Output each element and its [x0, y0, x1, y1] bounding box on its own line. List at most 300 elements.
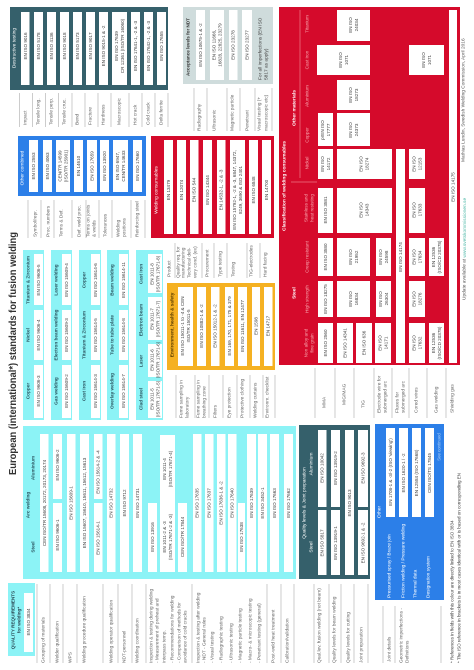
- row labels: arc welding: Welding coordination: [134, 618, 140, 663]
- column headings: [110, 264, 114, 409]
- standards boxes: arc welding: EN ISO 15609-1: [68, 486, 74, 520]
- column headings: arc welding: Steel: [30, 541, 36, 553]
- standards boxes: destructive testing: EN ISO 17641-1, -2 & -3: [133, 21, 138, 71]
- column headings: [138, 264, 144, 410]
- standards boxes: destructive testing: EN ISO 17642-1, -2 & -3: [146, 21, 151, 71]
- standards boxes: EN ISO 9606-5: [36, 264, 41, 296]
- row labels: destructive testing: Delta ferrite: [158, 100, 164, 125]
- row labels: arc welding: avoidance of cold cracks: [182, 610, 188, 663]
- row labels: arc welding: WPS: [68, 652, 74, 663]
- column headings: arc welding: Aluminium: [30, 456, 36, 480]
- column headings: Cast iron: [138, 264, 144, 284]
- heading: other: Other: [376, 506, 382, 518]
- standards boxes: classification grid: EN ISO: [348, 291, 353, 307]
- standards boxes: classification grid: EN ISO 14341: [342, 328, 348, 358]
- standards boxes: classification grid: 1071: [344, 54, 349, 65]
- row labels: NDT methods: macroscopic etc): [264, 94, 270, 131]
- standards boxes: acceptance levels: EN ISO 23277: [244, 30, 250, 60]
- standards boxes: [91, 254, 100, 418]
- standards boxes: classification grid: EN ISO: [378, 335, 382, 351]
- row labels: consumables: Hard facing: [262, 252, 268, 277]
- standards boxes: classification grid: 1071: [427, 54, 432, 65]
- standards boxes: destructive testing: EN ISO 9015-1 & -2: [101, 25, 106, 66]
- standards boxes: classification grid: EN ISO: [378, 249, 383, 265]
- column headers: classification: Copper: [304, 127, 310, 143]
- panel: acceptance levels for NDT: [183, 7, 273, 84]
- row labels: classification: [315, 368, 456, 418]
- heading: quality requirements: QUALITY REQUIREMENTS: [10, 591, 16, 649]
- standards boxes: arc welding: EN ISO 15614-2 & -4: [96, 450, 100, 494]
- standards boxes: quality levels: [318, 430, 368, 575]
- standards boxes: classification grid: EN ISO: [412, 202, 416, 218]
- row labels: arc welding: [37, 584, 294, 663]
- row labels: other combined: [28, 200, 145, 238]
- column headers: classification: heat resisting: [310, 194, 314, 222]
- row labels: arc welding: - Visual testing: [210, 631, 216, 663]
- panel: welding procedure specification processes: [51, 250, 72, 420]
- row labels: other combined: Terms on joints: [86, 204, 92, 237]
- standards boxes: EN ISO 15609-4: [64, 263, 69, 297]
- standards boxes: EHS: ISO/TR 15011-5: [186, 309, 191, 343]
- row labels: EHS: Protective clothing: [240, 378, 246, 418]
- column headings: Clad steel: [138, 388, 144, 410]
- standards boxes: classification grid: (ISO/CD 20378): [437, 240, 442, 273]
- note: all imperfections: For all imperfections (EN ISO: [258, 17, 264, 80]
- standards boxes: arc welding: EN ISO 13916: [150, 522, 155, 552]
- row labels: destructive testing: [20, 93, 168, 127]
- row labels: EHS: laboratory: [184, 396, 190, 418]
- standards boxes: other: [386, 428, 434, 517]
- row labels: arc welding: - Radiographic testing: [218, 616, 224, 663]
- row labels: NDT methods: Ultrasonic: [212, 109, 218, 131]
- row labels: EHS: Fume sampling in: [178, 380, 184, 418]
- standards boxes: other: EN ISO 1620-1 / -2: [401, 453, 406, 493]
- standards boxes: acceptance levels: [196, 10, 252, 80]
- row labels: destructive testing: Hot crack: [132, 104, 138, 125]
- standards boxes: arc welding: EN ISO 9712: [122, 489, 127, 517]
- standards boxes: other combined: EN ISO 13920: [102, 151, 107, 181]
- standards boxes: other combined: EN ISO 4063: [45, 152, 50, 180]
- panel: welding consumables: [151, 136, 274, 238]
- panel: procedure qualification materials: [79, 250, 101, 420]
- standards boxes: EN 1011-8: [150, 263, 154, 285]
- standards boxes: (ISO/TR 17671-6): [156, 341, 160, 378]
- row labels: EHS: Fume sampling in: [196, 380, 202, 418]
- row labels: arc welding: Inspection & testing after welding: [196, 592, 202, 663]
- standards boxes: arc welding: EN ISO 3452-1: [260, 487, 265, 519]
- heading: acceptance levels: Acceptance levels for NDT: [186, 18, 190, 76]
- row labels: NDT methods: Penetrant: [244, 110, 250, 131]
- row labels: arc welding: - Ultrasonic testing: [228, 623, 234, 663]
- panel: quality levels and joint preparation: [299, 425, 370, 579]
- standards boxes: EN ISO 15614-8: [121, 318, 126, 352]
- standards boxes: arc welding: (ISO/TR 17671-4): [168, 450, 173, 487]
- row labels: consumables: TIG-electrodes: [248, 245, 254, 277]
- standards boxes: classification grid: EN ISO 636: [362, 330, 366, 355]
- row labels: destructive testing: Cold crack: [146, 102, 152, 125]
- standards boxes: destructive testing: EN ISO 17655: [159, 31, 164, 61]
- row labels: classification: Cored wires: [414, 387, 420, 413]
- row labels: quality levels: Qual.lev. fusion welding (not beam): [316, 588, 322, 663]
- note: all imperfections: [258, 17, 270, 80]
- standards boxes: classification grid: 18276: [418, 292, 422, 305]
- column headings: Electron beam welding: [54, 309, 58, 361]
- heading: quality levels: Aluminium: [308, 453, 314, 475]
- standards boxes: destructive testing: EN ISO 17639: [114, 31, 119, 61]
- standards boxes: EN 1011-5: [150, 388, 154, 410]
- standards boxes: EN ISO 15614-3: [93, 374, 98, 408]
- standards boxes: EN ISO 15609-2: [64, 374, 69, 408]
- standards boxes: classification grid: 26304: [384, 292, 389, 305]
- standards boxes: acceptance levels: 16828, 22825, 23279: [218, 23, 222, 67]
- column headers: classification: Non alloy and: [304, 328, 308, 357]
- standards boxes: arc welding: EN ISO 15614-1: [96, 521, 100, 555]
- panel: filler qualification by material: [23, 250, 44, 420]
- standards boxes: classification grid: 24598: [384, 250, 389, 263]
- column headings: [26, 256, 30, 399]
- standards boxes: arc welding: [40, 434, 293, 572]
- standards boxes: acceptance levels: EN ISO 23278: [230, 30, 236, 60]
- heading: quality requirements: for welding*: [16, 607, 22, 633]
- row labels: consumables: Type testing: [218, 251, 224, 277]
- row labels: EHS: Environm. checklist: [264, 376, 270, 418]
- standards boxes: classification grid: EN ISO: [358, 202, 364, 218]
- panel: procedure qualification applications: [107, 250, 129, 420]
- column headers: classification: Aluminium: [304, 85, 310, 107]
- standards boxes: EN 1011-7: [150, 308, 154, 330]
- row labels: quality levels: Quality levels for cutting: [346, 612, 352, 663]
- standards boxes: arc welding: EN ISO 17662: [286, 488, 291, 518]
- row labels: EHS: [176, 375, 275, 418]
- row labels: quality levels: Quality levels for beam welding: [332, 596, 338, 663]
- column headings: Nickel: [26, 328, 30, 342]
- row labels: joint details: Joint details: [386, 636, 392, 662]
- standards boxes: EHS: EN 169, 170, 171, 175 & 379: [227, 296, 232, 356]
- standards boxes: arc welding: EN ISO 17639: [249, 488, 254, 518]
- row labels: consumables: Testing: [230, 261, 236, 277]
- standards boxes: classification grid: 14343: [364, 203, 370, 216]
- panel: quality requirements: [8, 583, 35, 656]
- standards boxes: other: CEN ISO/TS 17845: [427, 453, 432, 493]
- row labels: classification: Electrode wire for: [376, 375, 382, 413]
- standards boxes: quality levels: EN ISO 10042: [320, 453, 324, 483]
- standards boxes: classification grid: 17634: [418, 250, 422, 263]
- credit: author: Mathias Lundin, Swedish Welding Commission, April 2016: [460, 38, 466, 162]
- standards boxes: classification grid: 16834: [354, 292, 359, 305]
- standards boxes: acceptance levels: EN ISO 10675-1 & -2: [198, 23, 203, 67]
- standards boxes: EN 1011-6: [150, 349, 154, 371]
- panel: other combined (blue): [18, 136, 146, 196]
- row labels: consumables: Procurement: [204, 249, 210, 277]
- panel: classification of welding consumables: [279, 7, 460, 365]
- standards boxes: classification grid: EN ISO: [358, 156, 364, 172]
- row labels: classification: Gas welding: [434, 386, 440, 413]
- standards boxes: other combined: CEN/TR 14599: [58, 150, 62, 182]
- standards boxes: classification grid: EN ISO: [412, 156, 416, 172]
- row labels: NDT methods: Radiography: [196, 103, 202, 131]
- row labels: arc welding: Welding procedure qualification: [82, 596, 88, 663]
- standards boxes: EN ISO 9606-3: [36, 375, 41, 407]
- standards boxes: quality levels: EN ISO 9692-3: [360, 452, 366, 484]
- heading: destructive testing: Destructive testing: [12, 28, 18, 68]
- standards boxes: other combined: [29, 140, 142, 192]
- standards boxes: classification grid: 17777: [326, 123, 331, 136]
- standards boxes: (ISO/TR 17671-8): [156, 255, 160, 292]
- row labels: NDT methods: Visual testing (+: [256, 97, 262, 131]
- heading: other: See continued: [436, 433, 442, 461]
- column headers: classification: High strength: [304, 285, 310, 313]
- standards boxes: (ISO/TR 17671-5): [156, 380, 160, 417]
- standards boxes: EHS: EN 14717: [266, 315, 270, 336]
- standards boxes: EN ISO 15614-5: [93, 318, 98, 352]
- standards boxes: EHS: EN ISO 10882-1 & -2: [199, 304, 204, 348]
- row labels: consumables: Quality req. for: [176, 246, 182, 278]
- standards boxes: classification grid: [317, 10, 457, 363]
- row labels: arc welding: - Recommendations for welding: [170, 595, 176, 663]
- standards boxes: [148, 254, 162, 418]
- standards boxes: arc welding: EN ISO 17635: [194, 488, 200, 518]
- standards boxes: welding consumables: EN 13479: [166, 179, 171, 200]
- row labels: classification: Shielding gas: [450, 384, 456, 413]
- heading: classification: Other materials: [292, 90, 298, 126]
- standards boxes: destructive testing: EN ISO 4136: [49, 32, 54, 60]
- standards boxes: classification grid: EN ISO 2560: [323, 329, 328, 357]
- column headings: Tube to tube plate: [110, 315, 114, 355]
- footnotes: [450, 473, 462, 663]
- standards boxes: classification grid: EN ISO: [348, 249, 353, 265]
- column headings: arc welding: Arc welding: [26, 492, 30, 518]
- column headers: classification: [304, 15, 314, 357]
- heading: welding consumables: Welding consumables: [154, 166, 160, 214]
- standards boxes: other combined: EN ISO 17660: [135, 151, 140, 181]
- standards boxes: EHS: EN ISO 15011-1 to -4 & CEN: [180, 296, 185, 356]
- row labels: destructive testing: Tensile long.: [36, 98, 42, 125]
- standards boxes: classification grid: EN ISO: [412, 335, 416, 351]
- row labels: EHS: breathing zone: [202, 386, 208, 418]
- panel: destructive testing: [10, 7, 168, 90]
- row labels: destructive testing: Hardness: [100, 104, 106, 125]
- standards boxes: arc welding: EN ISO 15607, 15610, 15611, 15612, 15613: [82, 457, 87, 548]
- row labels: arc welding: Calibration/validation: [284, 618, 290, 663]
- heading: quality levels: [302, 453, 314, 553]
- column headings: Electron beam: [138, 304, 144, 336]
- column headers: classification: Titanium: [304, 15, 310, 33]
- standards boxes: classification grid: 14171: [384, 336, 388, 349]
- row labels: EHS: Welding curtains: [252, 382, 258, 418]
- standards boxes: destructive testing: CR 12361 (ISO/TR 16060): [120, 18, 125, 73]
- row labels: consumables: very cond. (ex): [192, 246, 198, 278]
- standards boxes: classification grid: EN ISO: [412, 249, 416, 265]
- standards boxes: classification grid: 17633: [418, 203, 422, 216]
- standards boxes: classification grid: EN ISO: [412, 291, 416, 307]
- standards boxes: other combined: EN ISO 6947,: [115, 152, 120, 180]
- row labels: EHS: Filters: [212, 404, 218, 418]
- standards boxes: EN ISO 15614-7: [121, 374, 126, 408]
- row labels: destructive testing: Bend: [74, 113, 80, 125]
- standards boxes: acceptance levels: EN ISO 11666,: [212, 30, 216, 60]
- row labels: other combined: Reinforcing steel: [134, 201, 140, 237]
- column headings: Cast iron: [82, 381, 86, 401]
- row labels: arc welding: - Macro- & microscopic testing: [248, 598, 254, 663]
- row labels: joint details: Definitions: [404, 640, 410, 663]
- standards boxes: welding consumables: [164, 140, 271, 234]
- standards boxes: arc welding: EN ISO 17640: [230, 488, 234, 518]
- panel: other (blue): [375, 424, 444, 600]
- heading: other combined: Other combined: [20, 150, 26, 185]
- standards boxes: welding consumables: EN ISO 15792-1, -2 & -3, 6847, 14372,: [232, 150, 237, 230]
- standards boxes: classification grid: prEN ISO: [320, 120, 325, 140]
- standards boxes: classification grid: 18274: [364, 157, 370, 170]
- row labels: arc welding: - NDT - General rules: [202, 617, 208, 663]
- row labels: arc welding: Welder qualification: [54, 621, 60, 663]
- row labels: joint details: [383, 606, 441, 663]
- row labels: arc welding: Grouping of materials: [40, 617, 46, 663]
- row labels: other combined: Welding: [116, 219, 122, 237]
- standards boxes: classification grid: 12153: [418, 157, 422, 170]
- title: European (international*) standards for fusion welding: [8, 232, 19, 475]
- column headers: classification: Cast iron: [304, 50, 310, 69]
- row labels: other combined: Symbol/repr.: [32, 210, 38, 237]
- row labels: EHS: Eye protection: [226, 387, 232, 418]
- standards boxes: [62, 254, 71, 418]
- standards boxes: EHS: EN ISO 15012-1 & -2: [212, 304, 218, 348]
- credit: update link: Update available at www.svetskommissionen.se: [462, 198, 468, 300]
- heading: other: [376, 433, 442, 518]
- standards box: EN ISO 3834: EN ISO 3834: [26, 608, 31, 636]
- column headings: Laser welding: [54, 264, 58, 296]
- row labels: arc welding: Inspection & testing during welding: [148, 589, 154, 663]
- column headings: Copper: [82, 272, 86, 288]
- row labels: arc welding: - Magnetic particle testing: [238, 608, 244, 663]
- standards boxes: destructive testing: EN ISO 9018: [62, 32, 67, 60]
- row labels: NDT methods: Magnetic particle: [230, 94, 236, 131]
- standards boxes: classification grid: EN ISO: [348, 87, 353, 103]
- standards boxes: classification grid: 24034: [354, 18, 359, 31]
- standards boxes: classification grid: EN ISO 3580: [323, 243, 328, 271]
- footnotes: * The ISO reference in brackets is in most cases identical with or is based on corresponding EN: [456, 473, 462, 663]
- row labels: quality levels: Joint preparation: [358, 627, 364, 663]
- row labels: destructive testing: Tensile perp.: [48, 98, 54, 125]
- row labels: destructive testing: Macroscopic: [116, 97, 122, 125]
- standards boxes: classification grid: 17632: [418, 336, 422, 349]
- column headings: Titanium & Zirconium: [82, 311, 86, 359]
- standards boxes: welding consumables: 8249, 3690 & ISO 2401: [238, 166, 243, 214]
- standards boxes: arc welding: EN ISO 17663: [272, 488, 277, 518]
- row labels: consumables: Product: [166, 260, 172, 277]
- standards boxes: classification grid: EN 12536: [431, 246, 436, 267]
- column headings: [82, 272, 86, 401]
- row labels: quality levels: [314, 584, 368, 663]
- row labels: arc welding: interpass temp.: [162, 630, 168, 663]
- row labels: NDT methods: [194, 88, 272, 131]
- row labels: classification: Fluxes for: [394, 392, 400, 413]
- column headers: classification: Creep resistant: [304, 240, 310, 273]
- standards boxes: (ISO/TR 17671-7): [156, 300, 160, 337]
- standards boxes: other: EN 12584 (ISO 17668): [414, 449, 419, 496]
- standards boxes: classification grid: EN ISO: [378, 291, 383, 307]
- standards boxes: other combined: CEN/TR 14633: [121, 150, 126, 182]
- standards boxes: quality levels: EN ISO 5817: [320, 529, 324, 557]
- row labels: destructive testing: Tensile cruc.: [62, 98, 68, 125]
- standards boxes: other: EN 1708-1 & -3/-2 (ISO 'viewing'): [388, 438, 393, 506]
- standards boxes: classification grid: 24373: [354, 123, 359, 136]
- standards boxes: arc welding: EN ISO 9606-2: [55, 449, 60, 481]
- standards boxes: quality levels: EN ISO 13919-2: [333, 451, 338, 485]
- standards boxes: arc welding: EN ISO 17638: [239, 522, 244, 552]
- standards boxes: other combined: EN 14610: [76, 155, 81, 176]
- standards boxes: other combined: EN ISO 17659: [90, 151, 94, 181]
- standards boxes: classification grid: EN ISO: [320, 156, 325, 172]
- column headings: [54, 264, 58, 405]
- standards boxes: classification grid: 21952: [354, 250, 359, 263]
- row titles: other: Friction welding / Pressure welding: [400, 524, 406, 598]
- column headings: Beam welding: [110, 264, 114, 296]
- footnotes: * References in fields with this colour are directly linked to EN ISO 3834: [450, 520, 454, 663]
- row labels: other combined: positions: [122, 217, 128, 237]
- standards boxes: [119, 254, 128, 418]
- standards boxes: arc welding: EN 1011-4: [162, 458, 167, 480]
- standards boxes: classification grid: EN ISO: [338, 52, 343, 68]
- standards boxes: arc welding: EN ISO 17636-1 & -2: [218, 481, 224, 525]
- standards boxes: arc welding: EN ISO 14732: [108, 488, 114, 518]
- column headings: Overlay welding: [110, 373, 114, 409]
- standards boxes: welding consumables: EN ISO 544: [192, 177, 196, 202]
- standards boxes: classification grid: EN ISO 14175: [450, 172, 456, 202]
- row labels: joint details: Geometric imperfections -: [398, 608, 404, 663]
- row labels: classification: MIG/MAG: [342, 383, 348, 405]
- row labels: other combined: Proc. numbers: [46, 205, 52, 237]
- row labels: arc welding: - Comparison of methods for: [176, 602, 182, 663]
- standards boxes: welding consumables: EN ISO 6848: [251, 176, 256, 204]
- row labels: destructive testing: Fracture: [88, 107, 94, 125]
- row labels: other combined: & welds: [92, 220, 98, 237]
- heading: classification: Classification of welding consumables: [282, 141, 288, 231]
- column headings: arc welding: [26, 456, 36, 553]
- heading: quality requirements: [10, 591, 22, 649]
- standards boxes: destructive testing: EN ISO 5178: [36, 32, 41, 60]
- standards boxes: other combined: EN ISO 2553: [31, 152, 36, 180]
- heading: classification: Steel: [292, 287, 298, 299]
- standards boxes: destructive testing: [21, 12, 166, 85]
- row titles: other: Thermal data: [412, 569, 418, 598]
- standards boxes: classification grid: EN ISO 3581: [323, 196, 328, 224]
- column headings: Laser: [138, 355, 144, 367]
- standards boxes: classification grid: EN ISO 18275: [323, 284, 328, 314]
- standards boxes: arc welding: CEN ISO/TR 15608, 20172, 20173, 20174: [42, 459, 47, 546]
- standards boxes: quality levels: EN ISO 9692-1 & -2: [360, 522, 366, 563]
- row labels: arc welding: Post-weld heat treatment: [270, 609, 276, 663]
- note: all imperfections: 5817 as apply): [264, 48, 270, 80]
- row labels: classification: submerged arc: [382, 380, 388, 413]
- standards boxes: EN ISO 15614-11: [121, 262, 126, 298]
- column headers: classification: Stainless and: [304, 194, 308, 222]
- standards boxes: arc welding: EN ISO 17637: [206, 488, 212, 518]
- column headings: Gas welding: [54, 377, 58, 405]
- row titles: other: Pressurised spray / Braze join: [386, 534, 392, 598]
- standards boxes: classification grid: EN ISO: [421, 52, 426, 68]
- row labels: arc welding: NDT-personnel: [122, 631, 128, 663]
- panel: environment, health and safety: [167, 283, 275, 370]
- standards boxes: welding consumables: EN 14532-1, -2 & -3: [218, 169, 224, 210]
- standards boxes: welding consumables: EN 12074: [179, 179, 184, 200]
- row labels: arc welding: - Measurement of preheat and: [154, 598, 160, 663]
- row labels: classification: MMA: [322, 396, 328, 408]
- standards boxes: arc welding: EN 1011-2 & -3: [162, 521, 167, 553]
- row labels: arc welding: - Penetrant testing (general): [256, 603, 262, 663]
- standards boxes: classification grid: EN ISO 14174: [398, 242, 403, 272]
- standards boxes: classification grid: (ISO/CD 20378): [437, 326, 442, 359]
- standards boxes: classification grid: EN ISO: [348, 122, 353, 138]
